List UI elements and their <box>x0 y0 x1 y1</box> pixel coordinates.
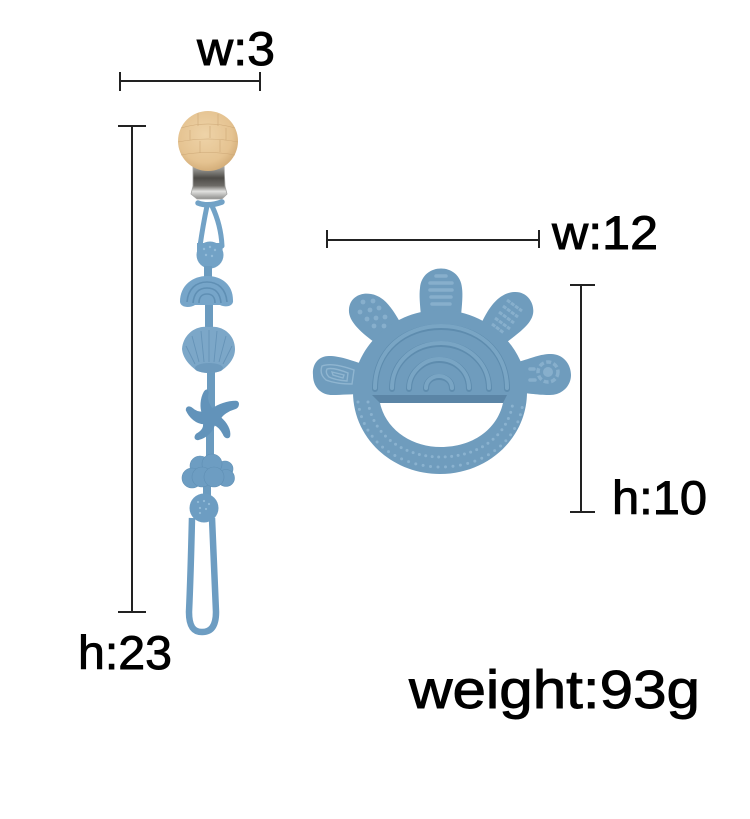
dimension: pacifier clip height <box>78 126 172 679</box>
pacifier clip chain <box>178 111 238 632</box>
wooden bead <box>178 111 238 171</box>
dimension: teether width: w:12 <box>551 206 658 259</box>
left lobe swirl <box>321 365 354 384</box>
stem <box>207 266 211 500</box>
dimension: teether width <box>327 206 658 259</box>
upper right lobe waves <box>492 300 522 333</box>
top lobe ridges <box>430 276 452 304</box>
starfish charm <box>187 391 238 439</box>
shell charm <box>182 327 235 373</box>
top dotted bead <box>196 242 224 268</box>
lower dotted bead <box>190 494 218 522</box>
dimension: pacifier clip width: w:3 <box>196 22 275 75</box>
rainbow ridges <box>375 327 507 389</box>
right lobe flower <box>530 362 558 382</box>
rainbow charm <box>180 276 233 307</box>
rainbow teether <box>313 268 571 474</box>
dimension: teether height <box>570 285 707 524</box>
dimension: pacifier clip height: h:23 <box>78 626 172 679</box>
metal clip <box>191 164 227 199</box>
upper left lobe dots <box>358 299 387 328</box>
lobes <box>313 268 571 395</box>
cloud charm <box>182 454 234 488</box>
teether body <box>353 310 527 474</box>
weight label: weight:93g <box>408 660 700 720</box>
dimension: pacifier clip width <box>120 22 275 91</box>
crossbar <box>372 395 507 403</box>
bottom loop <box>189 518 216 632</box>
ring dots <box>358 402 523 467</box>
dimension: teether height: h:10 <box>612 471 707 524</box>
cord loops <box>198 202 222 246</box>
